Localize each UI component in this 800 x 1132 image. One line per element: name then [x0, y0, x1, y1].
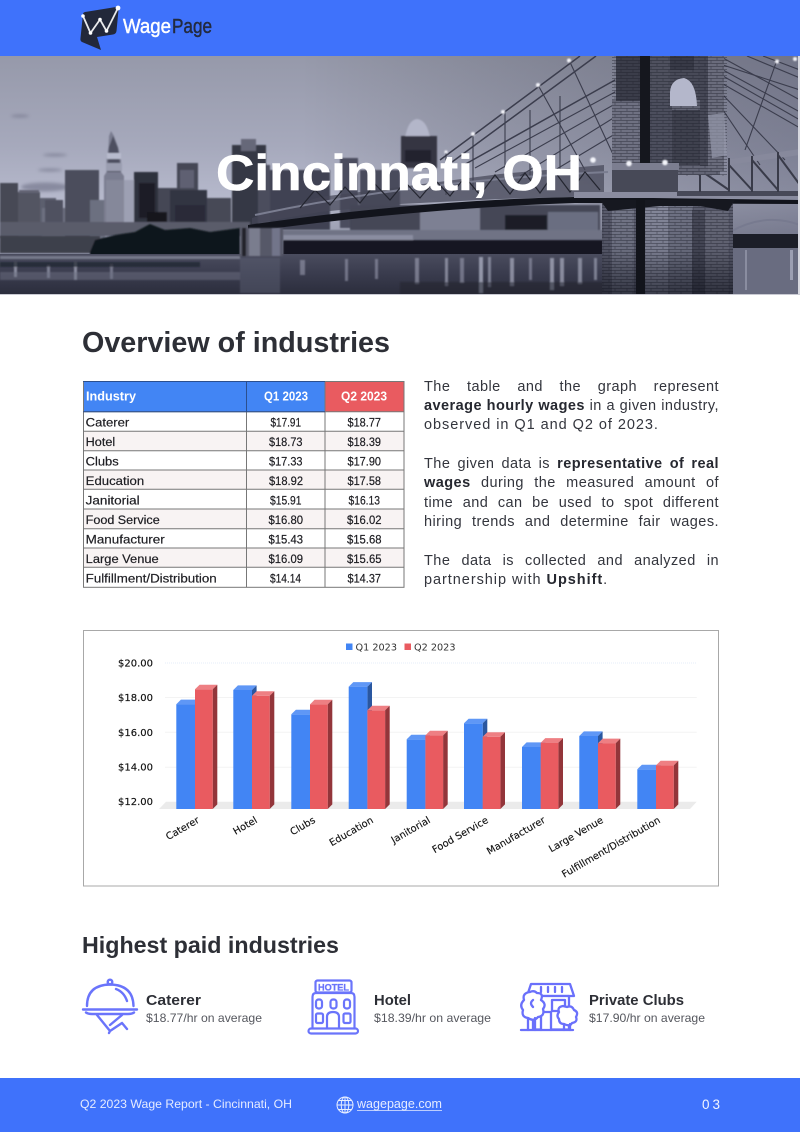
bridge lights [444, 57, 797, 166]
table: average hourly wages by industry: $16.13 [348, 493, 380, 507]
table: average hourly wages by industry: $17.33 [269, 454, 303, 468]
bars: Education [349, 682, 390, 809]
bars: Fulfillment/Distribution [637, 761, 678, 809]
table: average hourly wages by industry: Industry [86, 390, 136, 404]
text block: description of the data: time and can be used to spot different [424, 495, 719, 511]
table: average hourly wages by industry: Food Service [86, 513, 160, 527]
x axis labels: Clubs [289, 815, 318, 838]
logo wordmark: Page [172, 16, 212, 38]
text block: description of the data: average hourly wages in a given industry, [424, 398, 719, 414]
header bar with logo [0, 0, 800, 56]
heading: Highest paid industries: Highest paid industries [82, 932, 339, 958]
y axis and gridlines: $14.00 [118, 762, 153, 774]
table: average hourly wages by industry: $17.90 [348, 454, 381, 468]
legend: Q1 2023 [356, 642, 397, 654]
footer bar [0, 1078, 800, 1132]
item: Private Clubs [589, 993, 705, 1025]
bars: Janitorial [407, 731, 448, 809]
icon: hotel building [308, 980, 358, 1034]
x axis labels: Large Venue [547, 815, 606, 855]
legend [346, 642, 456, 654]
main stone tower [600, 56, 735, 295]
logo wordmark: Wage [123, 16, 171, 38]
x axis labels: Fulfillment/Distribution [560, 815, 662, 880]
text block: description of the data: hiring trends and determine fair wages. [424, 514, 719, 530]
bar chart: Q1 vs Q2 2023 wages by industry [83, 630, 719, 886]
table: average hourly wages by industry: Q2 2023 [341, 390, 387, 404]
text block: description of the data: wages during the measured amount of [424, 475, 719, 491]
left small bridge pier [240, 228, 283, 256]
x axis labels: Education [328, 815, 376, 849]
item: Hotel: Hotel [374, 993, 411, 1009]
table: average hourly wages by industry: Hotel [86, 435, 115, 449]
table: average hourly wages by industry: $15.91 [270, 493, 302, 507]
text block: description of the data: The table and the graph represent [424, 378, 719, 394]
hero: Cincinnati skyline and bridge photo [0, 56, 800, 295]
x axis labels: Manufacturer [485, 815, 548, 857]
table: average hourly wages by industry: Large Venue [86, 552, 159, 566]
page number: 03 [702, 1097, 720, 1112]
y axis and gridlines: $12.00 [118, 797, 153, 808]
clouds [11, 114, 69, 192]
y axis and gridlines: $16.00 [118, 728, 153, 739]
table: average hourly wages by industry: Education [86, 474, 144, 488]
water [0, 254, 800, 295]
icon: globe [337, 1097, 353, 1113]
table: average hourly wages by industry: $14.14 [270, 571, 301, 585]
legend: Q2 2023 [414, 642, 456, 654]
table: average hourly wages by industry: $16.80 [268, 513, 303, 527]
table: average hourly wages by industry: $16.02 [347, 513, 382, 527]
logo wordmark [123, 16, 212, 38]
table: average hourly wages by industry: Caterer [86, 416, 129, 430]
item: Hotel: $18.39/hr on average [374, 1011, 491, 1025]
item: Private Clubs: Private Clubs [589, 993, 684, 1009]
table: average hourly wages by industry: $14.37 [348, 571, 381, 585]
table: average hourly wages by industry: $18.39 [348, 435, 381, 449]
item: Caterer [146, 993, 262, 1025]
text block: description of the data: The given data is representative of real [424, 456, 719, 472]
Great American tower [245, 119, 605, 240]
y axis and gridlines: $18.00 [118, 693, 153, 704]
bars: Clubs [291, 700, 332, 809]
table: average hourly wages by industry: $17.91 [270, 416, 301, 430]
text block: description of the data: The data is collected and analyzed in [424, 553, 719, 569]
text block: description of the data: partnership with Upshift. [424, 572, 608, 588]
icon: WagePage logo [80, 6, 120, 50]
bars: Large Venue [579, 731, 620, 809]
panel: highest paid industries [82, 932, 705, 1035]
table: average hourly wages by industry: $18.73 [269, 435, 303, 449]
table: average hourly wages by industry: $15.43 [268, 532, 303, 546]
hero title: Cincinnati, OH [216, 145, 582, 201]
footer report title: Q2 2023 Wage Report - Cincinnati, OH [80, 1097, 292, 1111]
item: Caterer: $18.77/hr on average [146, 1011, 262, 1025]
table: average hourly wages by industry: $18.77 [348, 416, 381, 430]
text block: description of the data: observed in Q1 and Q2 of 2023. [424, 417, 659, 433]
table: average hourly wages by industry: $16.09 [268, 552, 303, 566]
bars: Food Service [464, 719, 505, 809]
x axis labels: Hotel [232, 815, 260, 838]
bridge cables [440, 56, 800, 195]
table: average hourly wages by industry: Manufacturer [86, 532, 165, 546]
bridge truss and deck [248, 149, 800, 232]
x axis labels: Caterer [164, 815, 202, 843]
table: average hourly wages by industry: $18.92 [269, 474, 303, 488]
bars: Caterer [176, 685, 217, 809]
icon: hotel building: HOTEL [318, 982, 349, 994]
item: Private Clubs: $17.90/hr on average [589, 1011, 705, 1025]
bars [176, 682, 678, 809]
icon: club storefront with trees [521, 984, 577, 1030]
tree band and shore [0, 224, 603, 256]
heading: Overview of industries: Overview of industries [82, 327, 390, 359]
table: average hourly wages by industry: Fulfillment/Distribution [86, 571, 217, 585]
table: average hourly wages by industry: $15.68 [347, 532, 382, 546]
x axis labels [164, 815, 662, 880]
website link: wagepage.com [356, 1097, 442, 1111]
item: Caterer: Caterer [146, 993, 201, 1009]
x axis labels: Food Service [431, 815, 490, 856]
left skyline [0, 131, 400, 240]
table: average hourly wages by industry: $17.58 [348, 474, 381, 488]
table: average hourly wages by industry: Clubs [86, 454, 119, 468]
table: average hourly wages by industry: Q1 2023 [264, 390, 308, 404]
table: average hourly wages by industry: Janitorial [86, 493, 140, 507]
x axis labels: Janitorial [389, 815, 432, 847]
bars: Manufacturer [522, 738, 563, 809]
y axis and gridlines [118, 658, 697, 809]
table: average hourly wages by industry: $15.65 [347, 552, 382, 566]
bars: Hotel [233, 685, 274, 809]
text block: description of the data [424, 378, 719, 588]
icon: cloche on a serving hand [83, 980, 137, 1033]
y axis and gridlines: $20.00 [118, 658, 153, 670]
table: average hourly wages by industry [83, 381, 404, 588]
item: Hotel [374, 993, 491, 1025]
